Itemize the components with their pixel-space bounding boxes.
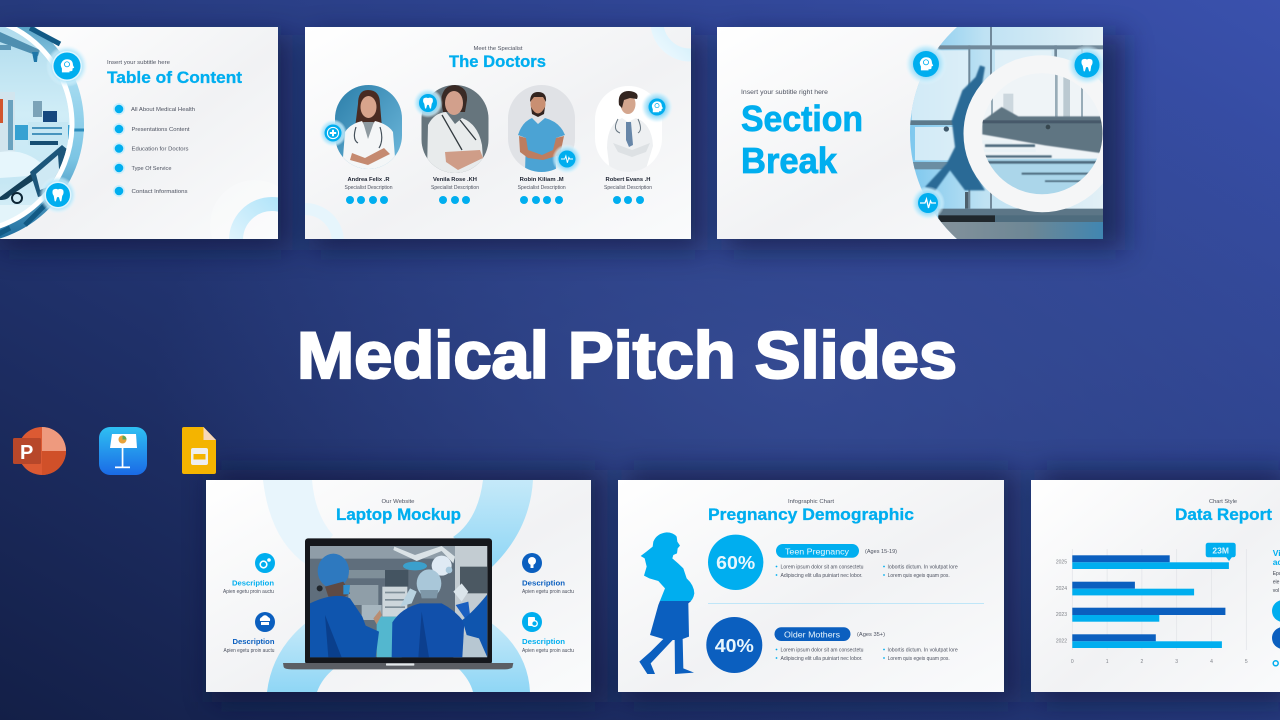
teen pregnancy group: Adipiscing elit ulla puiniart nec lobor. xyxy=(780,573,862,579)
older mothers group: Adipiscing elit ulla puiniart nec lobor. xyxy=(780,656,862,662)
teen pregnancy group: Lorem ipsum dolor sit am consectetu xyxy=(780,564,864,570)
60 percent xyxy=(708,535,763,590)
doctor: Robin Kiliam xyxy=(508,85,582,204)
subtitle: Insert your subtitle right here xyxy=(741,89,828,96)
teen pregnancy group: lobortis dictum. In volutpat lore xyxy=(888,564,958,570)
older mothers group: Lorem ipsum dolor sit am consectetu xyxy=(780,648,864,654)
bar chart: 2022 xyxy=(1056,638,1067,644)
feature: left top: Apien egetu proin auctu xyxy=(223,589,274,595)
icon: brain xyxy=(48,46,86,86)
icon: tooth xyxy=(1068,46,1103,84)
teen pregnancy group: Teen Pregnancy xyxy=(785,548,849,556)
callout 23M: 23M xyxy=(1212,546,1229,556)
bar chart: 4 xyxy=(1210,659,1213,665)
bar chart: 5 xyxy=(1245,659,1248,665)
feature: left bottom: Apien egetu proin auctu xyxy=(224,648,275,654)
older mothers group: Lorem quis egeis quam pos. xyxy=(888,656,950,662)
heading: Section xyxy=(741,98,863,139)
slide: data report xyxy=(1031,480,1280,692)
right text block xyxy=(1273,548,1280,594)
icon: powerpoint: P xyxy=(20,442,33,464)
contents list: Education for Doctors xyxy=(132,146,189,152)
corner rings xyxy=(305,27,691,239)
contents list: Presentations Content xyxy=(132,127,190,133)
callout 23M xyxy=(1206,543,1236,561)
motion blur hospital photo xyxy=(910,27,1103,239)
subtitle: Chart Style xyxy=(1209,499,1237,505)
older mothers group xyxy=(774,627,958,662)
heading: Table of Content xyxy=(107,68,242,87)
doctor: Robert Evans: Robert Evans .H xyxy=(606,177,651,183)
feature: left bottom: Description xyxy=(232,637,275,646)
40 percent: 40% xyxy=(715,636,754,656)
doctor: Andrea Felix xyxy=(319,85,402,204)
doctor: Robert Evans xyxy=(595,86,673,204)
hospital room photo xyxy=(0,27,70,223)
contents list: Contact Informations xyxy=(132,189,188,195)
doctor: Robin Kiliam: Robin Kiliam .M xyxy=(520,177,564,183)
bar chart: 0 xyxy=(1071,659,1074,665)
heading: Break xyxy=(741,140,838,181)
pregnant woman silhouette xyxy=(639,532,694,674)
feature: left top: Description xyxy=(232,578,274,588)
bar chart: 2025 xyxy=(1056,560,1067,566)
doctor: Venila Rose: Specialist Description xyxy=(431,185,479,191)
bar chart: 2023 xyxy=(1056,612,1067,618)
subtitle: Meet the Specialist xyxy=(474,46,523,52)
feature: right bottom xyxy=(522,612,574,654)
stat circles xyxy=(1272,600,1280,666)
laptop xyxy=(283,538,513,669)
bar chart xyxy=(1056,549,1248,665)
doctor: Venila Rose xyxy=(413,85,489,204)
feature: right top: Apien egetu proin auctu xyxy=(522,589,574,595)
subtitle: Insert your subtitle here xyxy=(107,60,170,66)
heading: Data Report xyxy=(1175,505,1272,524)
bar chart: 1 xyxy=(1106,659,1109,665)
bar chart: 2024 xyxy=(1056,586,1067,592)
contents list xyxy=(113,103,195,197)
icon: brain xyxy=(906,44,944,82)
older mothers group: Older Mothers xyxy=(784,630,840,640)
feature: right top xyxy=(522,553,574,595)
icon: tooth xyxy=(39,176,77,214)
right text block: vol xyxy=(1273,588,1279,594)
slide: section break xyxy=(717,27,1103,239)
doctor: Venila Rose: Venila Rose .KH xyxy=(433,177,477,183)
feature: right bottom: Description xyxy=(522,637,565,646)
60 percent: 60% xyxy=(716,553,755,573)
bar chart: 2 xyxy=(1141,659,1144,665)
heading: Pregnancy Demographic xyxy=(708,505,914,524)
decorative ring xyxy=(229,197,278,239)
right text block: ele xyxy=(1273,580,1280,586)
icon: powerpoint xyxy=(13,427,66,475)
teen pregnancy group xyxy=(776,544,958,579)
inner photo xyxy=(980,70,1106,199)
heading: The Doctors xyxy=(449,52,546,71)
main title: Medical Pitch Slides xyxy=(297,318,957,392)
slide: table of content xyxy=(0,27,278,239)
heading: Laptop Mockup xyxy=(336,505,461,524)
feature: left bottom xyxy=(224,612,275,654)
divider xyxy=(708,603,984,604)
icon: pulse xyxy=(912,186,944,218)
contents list: Type Of Service xyxy=(132,166,172,172)
slide: the doctors xyxy=(305,27,691,239)
bar chart: 3 xyxy=(1175,659,1178,665)
slide: pregnancy demographic xyxy=(618,480,1004,692)
older mothers group: (Ages 35+) xyxy=(857,632,885,638)
icon: keynote xyxy=(99,427,147,475)
white ring xyxy=(972,64,1112,203)
slide: laptop mockup xyxy=(206,480,591,692)
photo band xyxy=(0,9,84,239)
contents list: All About Medical Health xyxy=(131,107,195,113)
40 percent xyxy=(706,617,762,673)
feature: right bottom: Apien egetu proin auctu xyxy=(522,648,574,654)
doctor: Robert Evans: Specialist Description xyxy=(604,185,652,191)
doctor: Andrea Felix: Specialist Description xyxy=(344,185,393,191)
older mothers group: lobortis dictum. In volutpat lore xyxy=(888,648,958,654)
white ring xyxy=(0,16,72,232)
doctor: Andrea Felix: Andrea Felix .R xyxy=(348,177,390,183)
subtitle: Infographic Chart xyxy=(788,499,834,505)
feature: right top: Description xyxy=(522,578,565,588)
icon: google slides xyxy=(182,427,216,474)
decorative bands xyxy=(263,480,533,692)
subtitle: Our Website xyxy=(382,499,414,505)
teen pregnancy group: Lorem quis egeis quam pos. xyxy=(888,573,950,579)
teen pregnancy group: (Ages 15-19) xyxy=(865,549,897,555)
feature: left top xyxy=(223,553,275,595)
heading xyxy=(742,104,862,174)
doctor: Robin Kiliam: Specialist Description xyxy=(518,185,566,191)
